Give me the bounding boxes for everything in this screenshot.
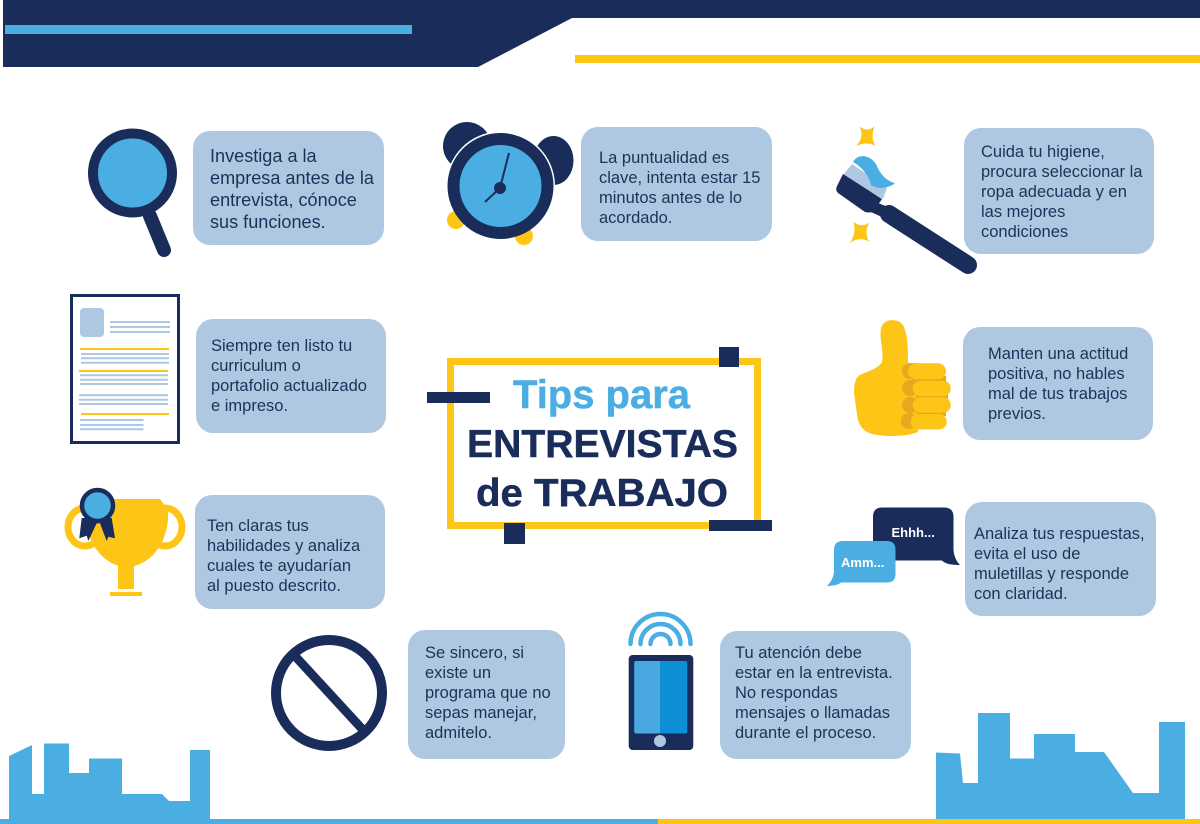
icon: curriculum document: [72, 296, 178, 442]
tip card: honesty: [408, 630, 565, 759]
tip card: answers: [965, 502, 1156, 616]
tip card: honesty: admitelo.: [425, 724, 492, 742]
tip card: curriculum: Siempre ten listo tu: [211, 337, 352, 355]
header band: [3, 0, 1200, 67]
icon: alarm clock: [443, 122, 574, 245]
tip card: attention: mensajes o llamadas: [735, 704, 890, 722]
tip card: honesty: Se sincero, si: [425, 644, 524, 662]
icon: trophy with ribbon: [68, 490, 182, 596]
icon: prohibited sign: [276, 640, 382, 746]
tip card: punctuality: clave, intenta estar 15: [599, 169, 760, 187]
tip card: honesty: programa que no: [425, 684, 551, 702]
tip card: honesty: sepas manejar,: [425, 704, 537, 722]
icon: magnifying glass: [93, 134, 172, 250]
tip card: punctuality: acordado.: [599, 209, 672, 227]
tip card: curriculum: curriculum o: [211, 357, 301, 375]
icon: speech bubbles: Amm...: [841, 555, 884, 570]
icon: thumbs up: [854, 320, 951, 436]
title frame: ENTREVISTAS: [467, 423, 738, 466]
icon: speech bubbles: [827, 508, 960, 586]
tip card: hygiene: Cuida tu higiene,: [981, 143, 1105, 161]
tip card: answers: evita el uso de: [974, 545, 1080, 563]
tip card: skills: [195, 495, 385, 609]
tip card: hygiene: condiciones: [981, 223, 1068, 241]
tip card: attitude: positiva, no hables: [988, 365, 1125, 383]
tip card: research: Investiga a la: [210, 146, 318, 166]
tip card: attitude: [963, 327, 1153, 440]
tip card: curriculum: e impreso.: [211, 397, 288, 415]
tip card: punctuality: La puntualidad es: [599, 149, 729, 167]
tip card: attention: No respondas: [735, 684, 838, 702]
tip card: attention: [720, 631, 911, 759]
icon: speech bubbles: Ehhh...: [892, 525, 935, 540]
tip card: curriculum: [196, 319, 386, 433]
tip card: hygiene: procura seleccionar la: [981, 163, 1143, 181]
tip card: attitude: Manten una actitud: [988, 345, 1128, 363]
tip card: curriculum: portafolio actualizado: [211, 377, 367, 395]
tip card: punctuality: [581, 127, 772, 241]
tip card: attention: Tu atención debe: [735, 644, 862, 662]
tip card: punctuality: minutos antes de lo: [599, 189, 742, 207]
icon: toothbrush: [836, 126, 968, 265]
tip card: hygiene: las mejores: [981, 203, 1065, 221]
tip card: skills: habilidades y analiza: [207, 537, 361, 555]
title frame: Tips para: [513, 373, 691, 417]
tip card: skills: cuales te ayudarían: [207, 557, 351, 575]
tip card: honesty: existe un: [425, 664, 491, 682]
tip card: attitude: mal de tus trabajos: [988, 385, 1127, 403]
tip card: skills: al puesto descrito.: [207, 577, 341, 595]
skyline: right: [936, 713, 1185, 820]
icon: smartphone with signal: [629, 614, 693, 750]
tip card: skills: Ten claras tus: [207, 517, 309, 535]
skyline: left: [9, 744, 210, 820]
tip card: hygiene: ropa adecuada y en: [981, 183, 1127, 201]
tip card: attention: estar en la entrevista.: [735, 664, 893, 682]
title frame: de TRABAJO: [476, 472, 728, 515]
tip card: research: entrevista, cónoce: [210, 190, 357, 210]
tip card: attention: durante el proceso.: [735, 724, 876, 742]
tip card: research: empresa antes de la: [210, 168, 375, 188]
tip card: attitude: previos.: [988, 405, 1046, 423]
tip card: answers: con claridad.: [974, 585, 1068, 603]
tip card: research: sus funciones.: [210, 212, 326, 232]
title frame: [427, 347, 772, 544]
tip card: answers: Analiza tus respuestas,: [974, 525, 1145, 543]
tip card: research: [193, 131, 384, 245]
tip card: answers: muletillas y responde: [974, 565, 1129, 583]
tip card: hygiene: [964, 128, 1154, 254]
footer band: [0, 819, 1200, 824]
